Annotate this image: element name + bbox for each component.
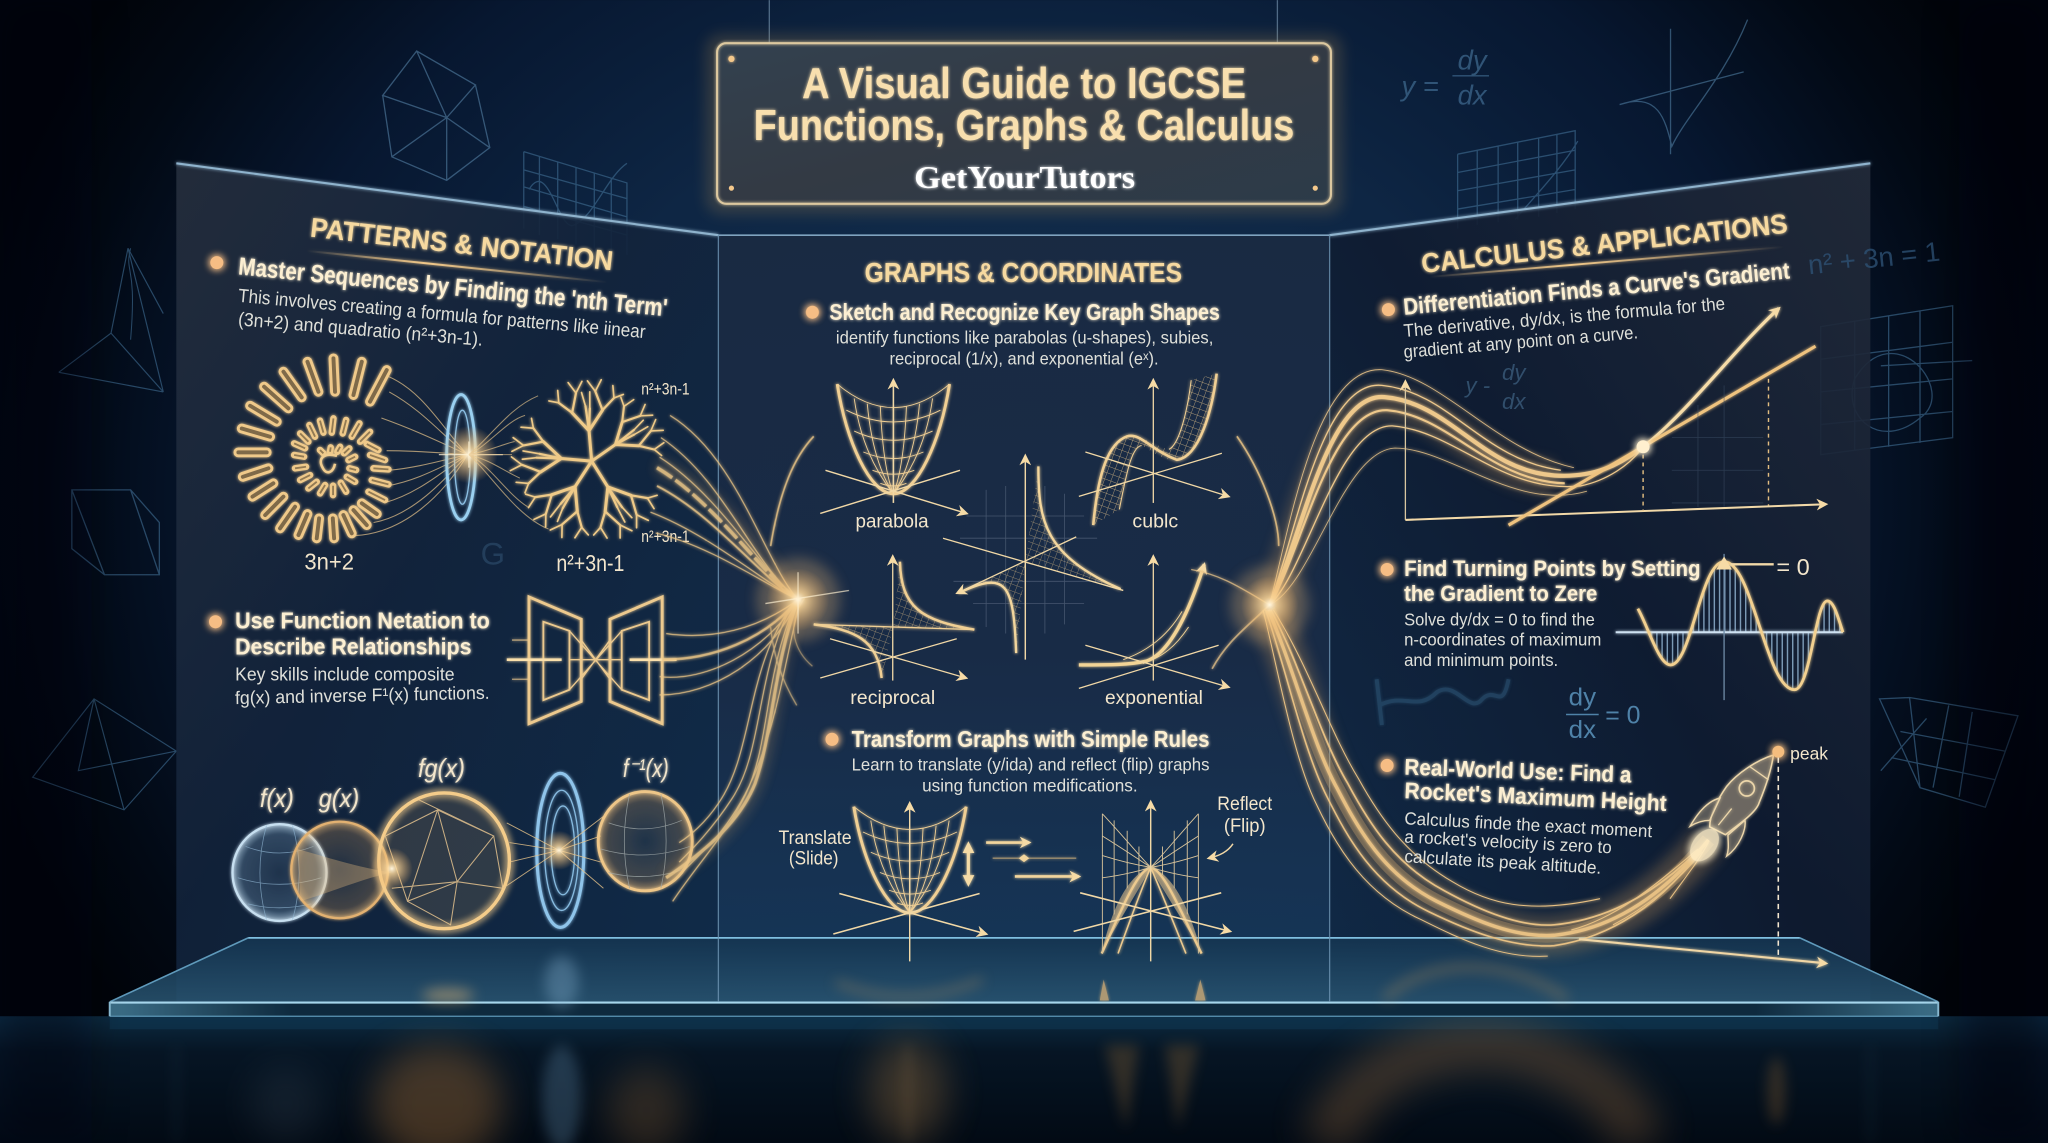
- item: transform graphs: Transform Graphs with Simple Rules: [852, 726, 1209, 752]
- brand name: GetYourTutors: [914, 160, 1135, 195]
- faded formula: y = dy/dx: [1399, 44, 1489, 111]
- item: turning points: Find Turning Points by Setting: [1404, 556, 1701, 581]
- bowtie function mapping icon: [507, 597, 677, 724]
- graph: cubic: cublc: [1132, 512, 1178, 533]
- title plaque: [705, 34, 1343, 214]
- item: function notation: Key skills include composite: [235, 664, 455, 685]
- burst at portal: [539, 831, 579, 870]
- sine wave turning point graph: = 0: [1776, 554, 1810, 580]
- faded formula right: n squared + 3n = 1: n² + 3n = 1: [1806, 236, 1941, 280]
- item: differentiation: gradient at any point on a curve.: [1403, 321, 1639, 362]
- faded pyramid: [59, 248, 163, 392]
- item: rocket real-world: [1404, 754, 1668, 878]
- item: sketch graphs: [829, 299, 1220, 368]
- bullet: [1381, 759, 1394, 772]
- rocket axis arrow: [1579, 939, 1826, 963]
- convergence glow right: [1230, 566, 1309, 644]
- rocket icon: [1690, 755, 1773, 856]
- item: transform graphs: Learn to translate (y/ida) and reflect (flip) graphs: [852, 755, 1210, 775]
- item: function notation: [235, 607, 490, 708]
- graph: translate parabola: (Slide): [789, 849, 839, 870]
- heading: patterns and notation: PATTERNS & NOTATION: [309, 212, 615, 276]
- branching tree illustration: [508, 378, 675, 549]
- graph: reciprocal: reciprocal: [850, 688, 935, 709]
- graph: translate parabola: [778, 803, 986, 961]
- sphere: g(x): [291, 822, 392, 918]
- centre column content: [778, 257, 1273, 961]
- bullet 1: [210, 256, 223, 269]
- panel: left glass: [176, 163, 718, 1002]
- function labels: f(x): [260, 783, 294, 813]
- rays across portal: [503, 816, 603, 888]
- faded letter: G: [481, 536, 505, 571]
- item: function notation: fg(x) and inverse F¹(x) functions.: [235, 682, 490, 708]
- portal ring: [447, 395, 475, 520]
- faded polyhedron bottom-right: [1880, 698, 2018, 807]
- heading: graphs and coordinates: GRAPHS & COORDINATES: [865, 257, 1182, 288]
- function labels: [260, 753, 669, 813]
- bullet: [825, 733, 839, 746]
- item: sketch graphs: Sketch and Recognize Key Graph Shapes: [829, 299, 1220, 325]
- rays to tree: [469, 396, 549, 529]
- item: rocket real-world: Real-World Use: Find a: [1404, 754, 1632, 788]
- item: transform graphs: [852, 726, 1210, 796]
- sphere: f(x): [232, 824, 327, 921]
- faded polyhedron bottom-left: [33, 699, 176, 810]
- item: sketch graphs: identify functions like parabolas (u-shapes), subies,: [836, 328, 1213, 348]
- bullet: [1382, 303, 1395, 316]
- faded formula inside panel: y -: [1463, 373, 1490, 398]
- sequence labels: n²+3n-1: [641, 380, 690, 399]
- faded grid with curve: [524, 152, 627, 255]
- title text: Functions, Graphs & Calculus: [754, 102, 1294, 150]
- faded formula inside panel: dx: [1502, 389, 1526, 414]
- item: rocket real-world: calculate its peak altitude.: [1404, 846, 1602, 878]
- sequence labels: n²+3n-1: [641, 527, 690, 546]
- left column content: [209, 212, 692, 929]
- item: master sequences: [237, 253, 669, 351]
- double arrow: [963, 841, 974, 887]
- convergence glow left: [756, 558, 849, 641]
- item: function notation: Use Function Netation to: [235, 607, 490, 633]
- graph: exponential: exponential: [1105, 688, 1203, 709]
- item: rocket real-world: a rocket's velocity is zero to: [1404, 827, 1612, 857]
- panel: right glass: [1330, 163, 1870, 1002]
- item: turning points: and minimum points.: [1404, 650, 1558, 670]
- graph: parabola: parabola: [856, 512, 929, 533]
- merge burst spheres: [371, 848, 413, 890]
- faded sketch: [1377, 679, 1509, 725]
- floor glass slab: [110, 938, 1938, 1016]
- gradient graph: [1405, 308, 1826, 525]
- graph: reflected parabolas: Reflect: [1217, 794, 1273, 815]
- graph: cubic: [1079, 374, 1228, 533]
- graph: parabola: [820, 380, 967, 533]
- peak marker: peak: [1790, 743, 1828, 763]
- rays from spiral to portal: [355, 376, 468, 536]
- item: turning points: n-coordinates of maximum: [1404, 629, 1601, 649]
- equation: dy/dx = 0: = 0: [1605, 703, 1640, 730]
- right column content: [1377, 208, 1843, 963]
- item: master sequences: Master Sequences by Finding the 'nth Term': [237, 253, 669, 322]
- graph: translate parabola: Translate: [778, 828, 852, 849]
- graph: exponential: [1079, 556, 1228, 709]
- heading: calculus and applications: CALCULUS & APPLICATIONS: [1420, 208, 1789, 279]
- item: rocket real-world: Calculus finde the exact moment: [1404, 808, 1653, 841]
- sequence labels: n²+3n-1: [556, 550, 624, 576]
- sequence labels: 3n+2: [304, 549, 354, 575]
- item: turning points: Solve dy/dx = 0 to find the: [1404, 610, 1595, 630]
- bullet: [1381, 563, 1394, 576]
- item: differentiation: The derivative, dy/dx, is the formula for the: [1403, 293, 1726, 341]
- bullet 2: [209, 615, 222, 628]
- light bundle: right wave to gradient curve: [1191, 370, 1643, 669]
- function labels: f⁻¹(x): [623, 753, 669, 783]
- panel edges: [176, 163, 1870, 1002]
- faded formula: y = dy/dx: dx: [1458, 80, 1488, 111]
- sequence labels: [304, 380, 690, 576]
- equation: dy/dx = 0: [1566, 684, 1640, 744]
- hanging wires: [769, 0, 1277, 50]
- faded formula inside panel: [1463, 360, 1527, 414]
- item: transform graphs: using function medifications.: [922, 776, 1138, 796]
- faded grid and loop right: [1821, 306, 1972, 455]
- item: differentiation: [1402, 257, 1791, 362]
- faded cube: [72, 490, 159, 575]
- graph: reciprocal: [814, 556, 974, 709]
- item: sketch graphs: reciprocal (1/x), and exponential (eˣ).: [889, 348, 1159, 368]
- item: turning points: the Gradient to Zere: [1404, 581, 1597, 606]
- faded plot top-right: [1620, 20, 1748, 154]
- item: rocket real-world: Rocket's Maximum Height: [1404, 777, 1668, 816]
- title text: A Visual Guide to IGCSE: [802, 60, 1246, 108]
- item: differentiation: Differentiation Finds a Curve's Gradient: [1402, 257, 1791, 320]
- graph: reflected parabolas: (Flip): [1224, 816, 1266, 837]
- light bundle: trail to rocket: [1263, 610, 1708, 956]
- faded formula: y = dy/dx: dy: [1458, 44, 1489, 75]
- function labels: fg(x): [418, 753, 465, 783]
- central hyperbola graph: [943, 456, 1123, 660]
- bullet: [806, 306, 819, 319]
- title text: [754, 60, 1294, 150]
- portal: inverse: [537, 773, 584, 927]
- faded formula: y = dy/dx: y =: [1399, 70, 1439, 101]
- starburst at portal: [439, 426, 503, 483]
- equation: dy/dx = 0: dx: [1569, 717, 1597, 744]
- transform arrows: [986, 843, 1079, 876]
- sphere: inverse: [598, 792, 692, 891]
- sine wave turning point graph: [1616, 554, 1843, 700]
- icosahedron wireframe: [383, 51, 490, 180]
- item: turning points: [1404, 556, 1701, 670]
- spiral pattern illustration: [238, 358, 388, 538]
- item: master sequences: (3n+2) and quadratio (n²+3n-1).: [237, 309, 484, 351]
- faint background math decorations: [33, 20, 2018, 810]
- equation: dy/dx = 0: dy: [1569, 684, 1597, 711]
- item: function notation: Describe Relationships: [235, 633, 472, 659]
- panel: centre glass: [718, 235, 1330, 1002]
- faded grid top-right: [1458, 131, 1578, 229]
- graph: reflected parabolas: [1074, 794, 1273, 961]
- function labels: g(x): [319, 783, 359, 813]
- item: master sequences: This involves creating a formula for patterns like iinear: [237, 286, 646, 343]
- rocket flame: [1684, 823, 1725, 867]
- sphere: fg(x): [379, 793, 509, 929]
- floor reflection area: [0, 1016, 2048, 1143]
- light bundles: left flows into convergence: [650, 415, 1279, 901]
- faded formula inside panel: dy: [1502, 360, 1527, 385]
- faded mark: [129, 248, 132, 340]
- peak marker: [1772, 743, 1828, 957]
